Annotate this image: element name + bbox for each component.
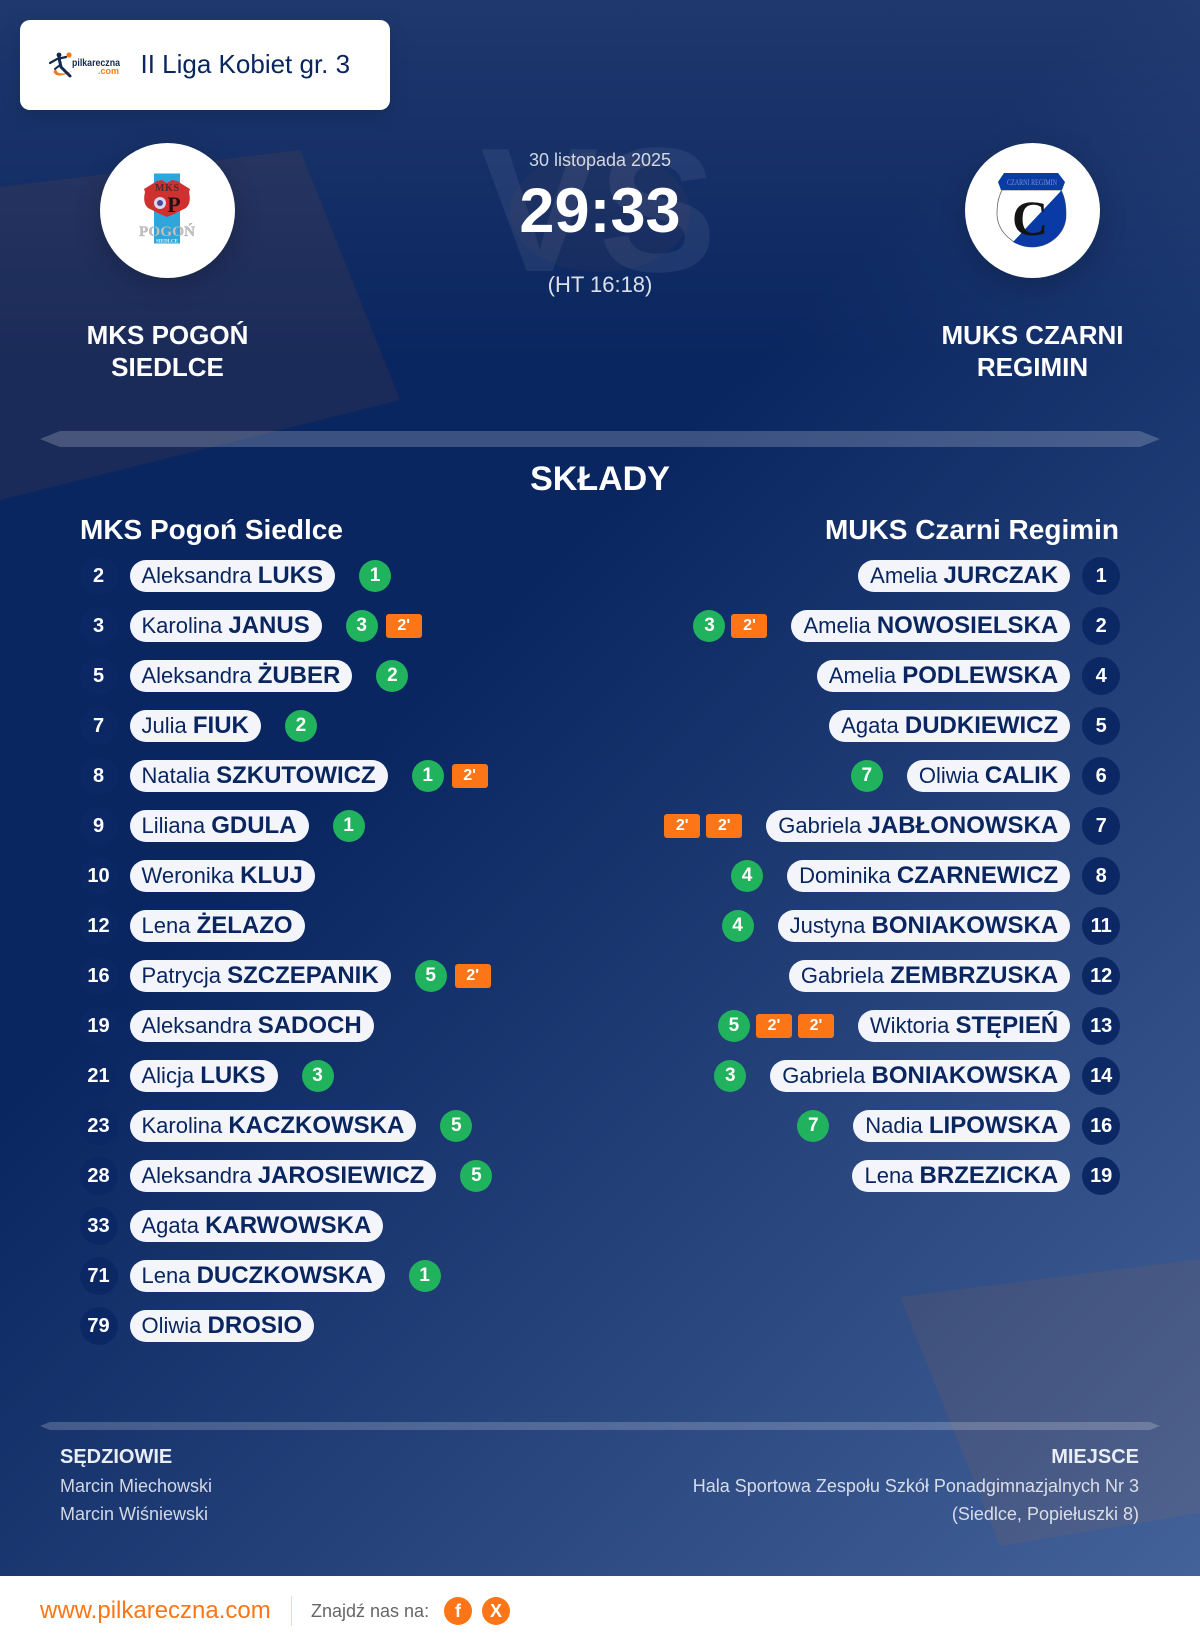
player 7: Julia FIUK [142, 712, 249, 739]
icon: X [482, 1597, 510, 1625]
venue address: Hala Sportowa Zespołu Szkół Ponadgimnazjalnych Nr 3 [693, 1476, 1139, 1496]
player 79: Oliwia DROSIO [142, 1312, 302, 1339]
player 2: 3 [704, 615, 715, 636]
venue heading: MIEJSCE [1051, 1446, 1139, 1468]
player 3: 3 [93, 614, 104, 636]
player 2 [693, 607, 1120, 645]
player 3: 3 [356, 615, 367, 636]
referees block [60, 1446, 212, 1524]
divider [40, 431, 1160, 447]
icon: Czarni Regimin logo: C [1012, 190, 1048, 246]
player 6 [851, 757, 1120, 795]
player 11: 4 [732, 915, 743, 936]
home squad heading: MKS Pogoń Siedlce [80, 514, 343, 545]
panel: away squad [664, 557, 1120, 1195]
player 4 [817, 657, 1120, 695]
player 13: Wiktoria STĘPIEŃ [870, 1012, 1058, 1039]
lower divider [40, 1422, 1160, 1430]
icon: Czarni Regimin logo: CZARNI REGIMIN [1007, 178, 1057, 186]
player 1: Amelia JURCZAK [870, 562, 1058, 589]
player 7 [664, 807, 1120, 845]
player 13 [718, 1007, 1120, 1045]
player 8: 8 [93, 764, 104, 786]
footer bar [0, 1576, 1200, 1646]
home crest [100, 142, 235, 278]
player 13: 2' [810, 1017, 822, 1034]
player 2: 2 [93, 564, 104, 586]
referees names [60, 1476, 212, 1524]
venue block [539, 1445, 1139, 1528]
player 7: 7 [1096, 814, 1107, 836]
player 10 [87, 860, 315, 892]
player 16: 2' [466, 967, 479, 984]
player 8 [731, 857, 1120, 895]
player 14: 3 [725, 1065, 736, 1086]
player 7 [93, 710, 317, 742]
player 16: 5 [425, 965, 436, 986]
player 28: Aleksandra JAROSIEWICZ [142, 1162, 424, 1189]
player 5 [829, 707, 1120, 745]
player 33 [87, 1210, 383, 1242]
icon: pilkareczna logo: .com [98, 66, 119, 77]
player 3: 2' [397, 617, 410, 634]
player 16: Patrycja SZCZEPANIK [142, 962, 379, 989]
icon: Pogoń Siedlce logo: P [167, 192, 181, 216]
player 13: 2' [768, 1017, 780, 1034]
follow label: Znajdź nas na: [311, 1601, 429, 1621]
player 8 [93, 760, 488, 792]
panel: home squad [80, 560, 492, 1345]
player 11: Justyna BONIAKOWSKA [790, 912, 1058, 939]
player 19 [852, 1157, 1120, 1195]
player 19: Aleksandra SADOCH [142, 1012, 362, 1039]
player 6: 6 [1096, 764, 1107, 786]
player 12: Lena ŻELAZO [142, 912, 293, 939]
section heading: SKŁADY [530, 460, 670, 498]
player 23: Karolina KACZKOWSKA [142, 1112, 404, 1139]
player 19 [87, 1010, 374, 1042]
player 9: 1 [343, 815, 354, 836]
player 5: 5 [1096, 714, 1107, 736]
player 1 [858, 557, 1120, 595]
player 21: 3 [312, 1065, 323, 1086]
player 19: Lena BRZEZICKA [864, 1162, 1058, 1189]
player 16: 7 [808, 1115, 819, 1136]
player 7: 2 [296, 715, 306, 736]
player 71: Lena DUCZKOWSKA [142, 1262, 373, 1289]
player 11 [722, 907, 1120, 945]
website url: www.pilkareczna.com [40, 1597, 271, 1624]
player 21: 21 [87, 1064, 110, 1086]
player 13: 5 [729, 1015, 739, 1036]
player 23: 23 [87, 1114, 110, 1136]
icon: facebook [444, 1597, 472, 1625]
player 28: 5 [471, 1165, 482, 1186]
player 7: 2' [676, 817, 689, 834]
follow label [291, 1596, 429, 1626]
player 10: Weronika KLUJ [142, 862, 303, 889]
player 28 [87, 1160, 492, 1192]
player 3 [93, 610, 422, 642]
player 10: 10 [87, 864, 110, 886]
icon: Pogoń Siedlce logo: POGOŃ [139, 222, 195, 240]
player 5: 5 [93, 664, 104, 686]
player 8: 1 [422, 765, 433, 786]
icon: pilkareczna logo [48, 52, 120, 78]
player 2: 2' [743, 617, 756, 634]
player 16: 16 [1090, 1114, 1112, 1136]
player 21 [87, 1060, 334, 1092]
player 5 [93, 660, 408, 692]
player 16 [797, 1107, 1120, 1145]
player 79: 79 [87, 1314, 110, 1336]
icon: facebook: f [455, 1601, 461, 1621]
player 23 [87, 1110, 472, 1142]
player 6: Oliwia CALIK [919, 762, 1058, 789]
player 13: 13 [1090, 1014, 1112, 1036]
player 8: 4 [742, 865, 752, 886]
player 2: 1 [370, 565, 380, 586]
player 11: 11 [1091, 914, 1112, 936]
away team name [942, 320, 1124, 382]
player 9 [93, 810, 365, 842]
player 12: Gabriela ZEMBRZUSKA [801, 962, 1058, 989]
player 33: 33 [87, 1214, 110, 1236]
player 5: Aleksandra ŻUBER [142, 662, 340, 689]
player 9: Liliana GDULA [142, 812, 297, 839]
away squad heading: MUKS Czarni Regimin [825, 514, 1119, 545]
icon: Czarni Regimin logo [996, 173, 1066, 248]
league name: II Liga Kobiet gr. 3 [140, 49, 350, 79]
player 12: 12 [1090, 964, 1112, 986]
player 19: 19 [1090, 1164, 1112, 1186]
venue address: (Siedlce, Popiełuszki 8) [952, 1504, 1139, 1524]
player 5: Agata DUDKIEWICZ [841, 712, 1058, 739]
home team name: MKS POGOŃ [87, 320, 248, 350]
referees names: Marcin Wiśniewski [60, 1504, 208, 1524]
player 12 [789, 957, 1120, 995]
referees heading: SĘDZIOWIE [60, 1446, 172, 1468]
home team name [87, 320, 248, 382]
player 14 [714, 1057, 1120, 1095]
player 7: 2' [718, 817, 731, 834]
player 7: 7 [93, 714, 104, 736]
player 79 [80, 1307, 314, 1345]
player 8: Natalia SZKUTOWICZ [142, 762, 376, 789]
player 3: Karolina JANUS [142, 612, 310, 639]
player 16: 16 [87, 964, 110, 986]
icon: X: X [490, 1601, 502, 1621]
player 2: Amelia NOWOSIELSKA [803, 612, 1058, 639]
player 4: Amelia PODLEWSKA [829, 662, 1058, 689]
league card [20, 20, 390, 110]
player 12: 12 [87, 914, 110, 936]
away team name: MUKS CZARNI [942, 320, 1124, 350]
player 9: 9 [93, 814, 104, 836]
referees names: Marcin Miechowski [60, 1476, 212, 1496]
player 14: Gabriela BONIAKOWSKA [782, 1062, 1058, 1089]
player 71 [80, 1257, 441, 1295]
icon: Pogoń Siedlce logo [139, 174, 195, 244]
big VS watermark: VS [480, 111, 717, 309]
player 71: 1 [419, 1265, 430, 1286]
player 6: 7 [862, 765, 872, 786]
player 2 [93, 560, 391, 592]
player 14: 14 [1090, 1064, 1112, 1086]
player 23: 5 [451, 1115, 462, 1136]
player 8: Dominika CZARNEWICZ [799, 862, 1058, 889]
player 33: Agata KARWOWSKA [142, 1212, 371, 1239]
player 2: 2 [1096, 614, 1107, 636]
away team name: REGIMIN [977, 352, 1088, 382]
away crest [965, 142, 1100, 278]
player 8: 2' [463, 767, 476, 784]
icon: Pogoń Siedlce logo: SIEDLCE [156, 239, 179, 244]
half-time score: (HT 16:18) [548, 272, 652, 297]
player 28: 28 [87, 1164, 110, 1186]
player 2: Aleksandra LUKS [142, 562, 323, 589]
player 71: 71 [87, 1264, 110, 1286]
final score: 29:33 [519, 176, 681, 246]
home team name: SIEDLCE [111, 352, 224, 382]
match date: 30 listopada 2025 [529, 150, 671, 170]
player 1: 1 [1096, 564, 1107, 586]
player 7: Gabriela JABŁONOWSKA [778, 812, 1058, 839]
player 4: 4 [1096, 664, 1107, 686]
icon: Pogoń Siedlce logo: MKS [155, 182, 179, 194]
player 5: 2 [387, 665, 398, 686]
player 19: 19 [87, 1014, 110, 1036]
player 16: Nadia LIPOWSKA [865, 1112, 1058, 1139]
player 21: Alicja LUKS [142, 1062, 266, 1089]
player 12 [87, 910, 305, 942]
player 16 [87, 960, 491, 992]
venue address [539, 1472, 1139, 1528]
player 8: 8 [1096, 864, 1107, 886]
